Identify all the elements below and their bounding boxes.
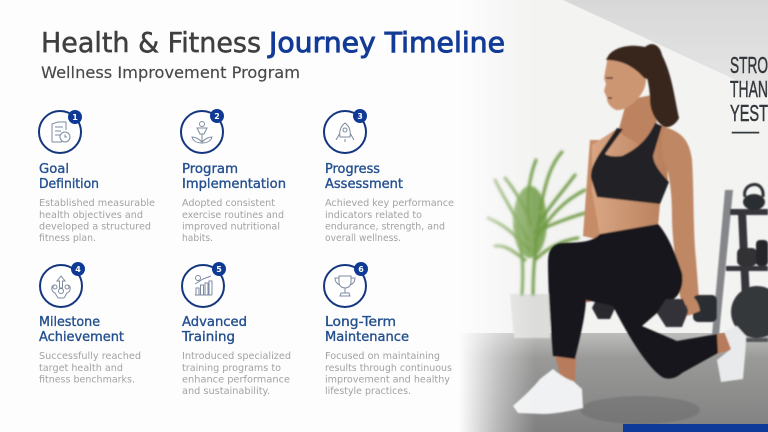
step 6: long-term maintenance — [324, 262, 452, 397]
description: indicators related to — [325, 210, 422, 221]
heading line 2: Assessment — [325, 177, 403, 192]
front sneaker — [513, 369, 583, 414]
icon: goal checklist and clock: 1 — [72, 113, 78, 122]
description: Achieved key performance — [325, 198, 454, 209]
description — [182, 351, 291, 397]
heading line 2: Achievement — [39, 330, 124, 345]
photo wall — [450, 0, 768, 335]
step 1: goal definition — [39, 110, 155, 244]
description: developed a structured — [39, 222, 151, 232]
step 3: progress assessment — [324, 109, 454, 244]
description: fitness benchmarks. — [39, 374, 135, 386]
face — [604, 56, 646, 110]
step 4: milestone achievement — [39, 262, 141, 386]
blue footer bar — [623, 424, 768, 432]
wall sign — [730, 52, 768, 133]
description: enhance performance — [182, 374, 290, 386]
icon: trophy: 6 — [358, 265, 364, 274]
description: training programs to — [182, 363, 281, 374]
wall shadow — [563, 0, 768, 95]
description: endurance, strength, and — [325, 222, 445, 232]
heading: Advanced — [182, 315, 247, 330]
description — [325, 198, 454, 244]
description: health objectives and — [39, 210, 143, 221]
description: Focused on maintaining — [325, 351, 440, 362]
photo: woman doing a lunge in a gym — [440, 0, 768, 432]
description: Introduced specialized — [182, 351, 291, 362]
icon: person meditating: 2 — [214, 112, 220, 121]
description: overall wellness. — [325, 233, 401, 244]
icon: group with arrow: 4 — [75, 265, 81, 274]
leggings — [548, 224, 718, 379]
facial features — [606, 78, 613, 98]
title: Health & Fitness — [41, 26, 261, 59]
description: target health and — [39, 363, 123, 374]
step 5: advanced training — [181, 262, 291, 397]
description: Adopted consistent — [182, 198, 275, 209]
sports bra — [591, 123, 669, 204]
description: improvement and healthy — [325, 374, 450, 386]
rear ankle — [714, 332, 732, 354]
subtitle: Wellness Improvement Program — [41, 63, 300, 82]
description: exercise routines and — [182, 210, 284, 221]
description: fitness plan. — [39, 233, 96, 244]
icon: rising bar chart: 5 — [216, 265, 222, 274]
far arm and dumbbell — [576, 140, 616, 319]
heading: Goal — [39, 162, 69, 177]
floor shadows — [580, 396, 700, 424]
description: Successfully reached — [39, 351, 141, 362]
gym floor — [450, 333, 768, 432]
heading: Program — [182, 162, 238, 177]
near arm — [662, 127, 702, 316]
ponytail and hair — [608, 44, 679, 127]
description — [39, 198, 155, 244]
description: habits. — [182, 233, 213, 244]
description — [182, 198, 284, 244]
neck — [618, 95, 658, 145]
heading: Progress — [325, 162, 380, 177]
heading: Long-Term — [325, 315, 396, 330]
description: results through continuous — [325, 363, 452, 374]
potted plant — [488, 152, 590, 338]
heading line 2: Maintenance — [325, 330, 409, 345]
left edge fade — [440, 0, 535, 432]
torso — [592, 125, 668, 236]
heading line 2: Definition — [39, 177, 99, 192]
hair cap — [606, 46, 652, 80]
heading: Milestone — [39, 315, 100, 330]
heading line 2: Training — [181, 330, 235, 345]
description: Established measurable — [39, 198, 155, 209]
near ankle — [555, 355, 576, 382]
near dumbbell — [657, 295, 717, 327]
description — [325, 351, 452, 397]
heading line 2: Implementation — [182, 177, 286, 192]
icon: rocket: 3 — [357, 112, 363, 121]
weight rack — [712, 185, 768, 342]
description: and sustainability. — [182, 386, 270, 397]
description — [39, 351, 141, 386]
title accent: Journey Timeline — [267, 26, 505, 59]
description: improved nutritional — [182, 222, 280, 232]
rear sneaker — [717, 326, 746, 382]
step 2: program implementation — [181, 109, 286, 244]
description: lifestyle practices. — [325, 386, 411, 397]
